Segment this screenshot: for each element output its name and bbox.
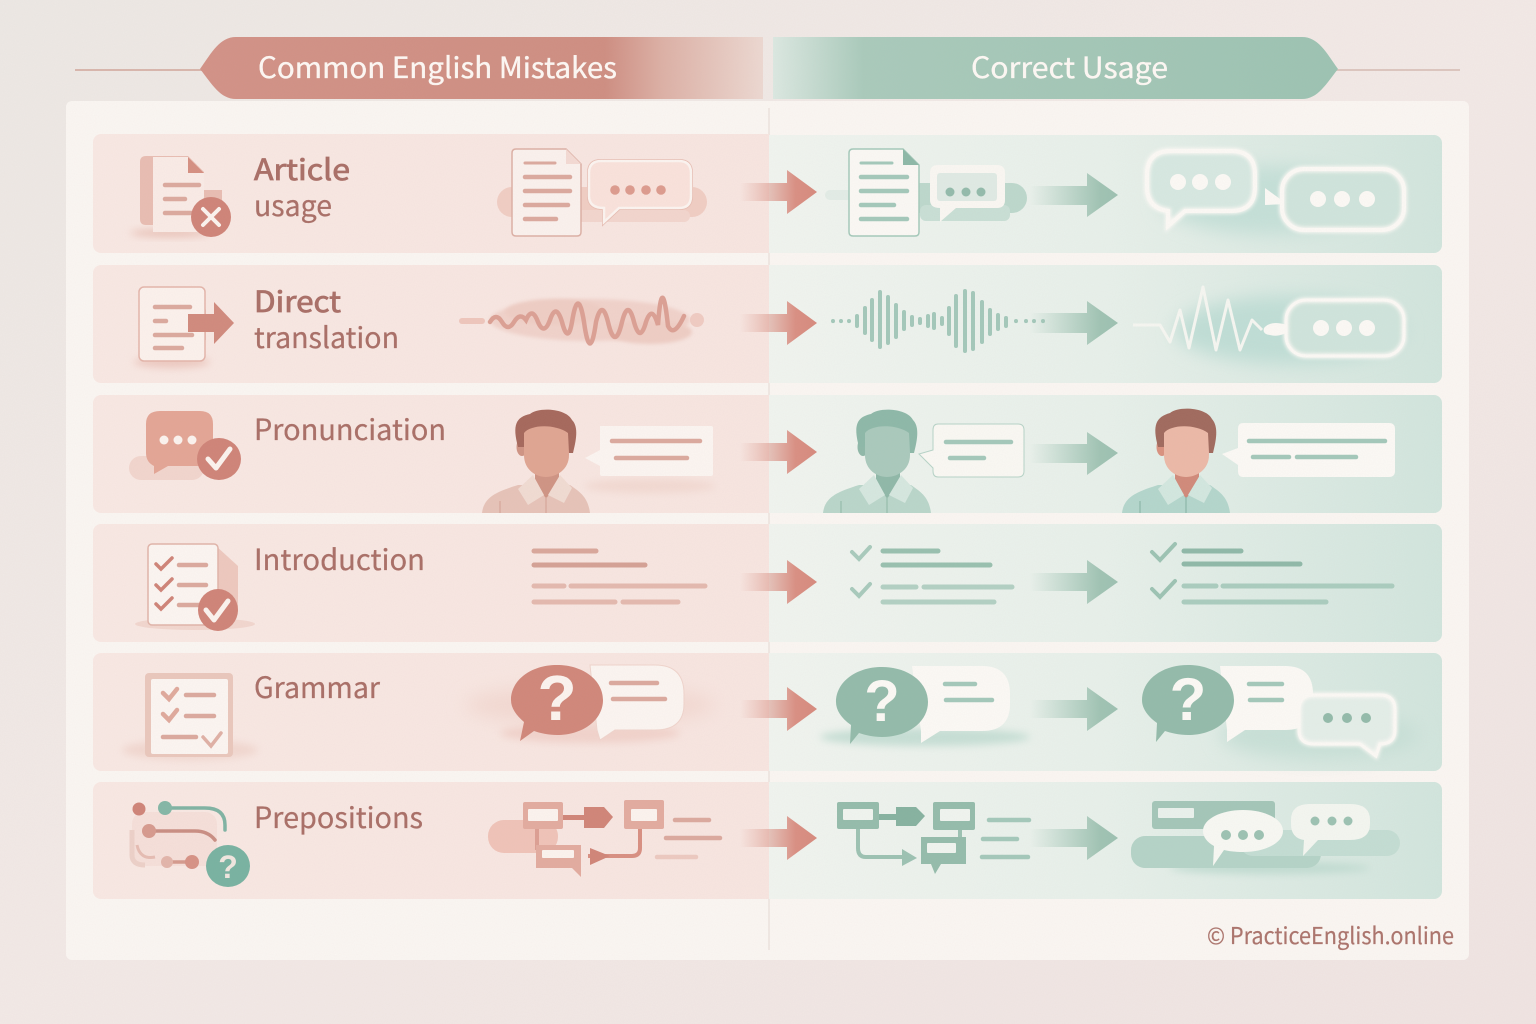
waveform messy	[462, 298, 704, 344]
header: correct usage	[773, 37, 1460, 99]
icon: document with arrow	[134, 281, 234, 368]
flow diagram mistake	[488, 800, 720, 877]
heading: direct translation: Direct	[254, 279, 341, 321]
heading: direct translation: translation	[254, 315, 399, 357]
row 3 backgrounds	[93, 395, 1442, 513]
footer credit: © PracticeEnglish.online	[1207, 917, 1454, 951]
question bubble improved: ?	[864, 669, 900, 734]
row 6: prepositions	[93, 782, 1442, 899]
row 2 backgrounds	[93, 265, 1442, 383]
arrow red	[740, 560, 817, 604]
heading: prepositions: Prepositions	[254, 795, 423, 837]
arrow green	[1030, 687, 1118, 731]
heading: pronunciation: Pronunciation	[254, 407, 446, 449]
icon: document with x	[130, 156, 231, 237]
header: common English mistakes: Common English Mistakes	[258, 45, 617, 87]
question bubble improved	[820, 666, 1030, 746]
question bubble corrected: ?	[1170, 666, 1206, 733]
icon: checklist	[135, 544, 255, 631]
arrow red	[740, 170, 817, 214]
question bubble mistake	[465, 662, 715, 743]
heading: direct translation	[254, 279, 399, 357]
row 4 backgrounds	[93, 524, 1442, 642]
text lines corrected	[1152, 544, 1392, 602]
icon: route with question	[132, 801, 250, 887]
arrow red	[740, 430, 817, 474]
row 1 backgrounds	[93, 134, 1442, 253]
icon: grammar sheet	[122, 673, 258, 760]
row 1: article usage	[93, 134, 1442, 253]
arrow green	[1030, 173, 1118, 217]
header: correct usage: Correct Usage	[971, 45, 1168, 87]
heading: article usage: Article	[254, 147, 350, 189]
heading: grammar: Grammar	[254, 665, 381, 707]
mistake illustration	[497, 149, 707, 236]
row 4: introduction	[93, 524, 1442, 642]
person corrected	[1122, 409, 1395, 513]
heading: article usage: usage	[254, 183, 332, 225]
person speaking with notes	[482, 410, 716, 513]
main white panel	[66, 101, 1469, 960]
arrow green	[1030, 816, 1118, 860]
improved illustration	[825, 149, 1027, 236]
arrow green	[1030, 560, 1118, 604]
pulse line and bubble	[1133, 287, 1405, 364]
flow diagram improved	[837, 802, 1029, 874]
row 6 backgrounds	[93, 782, 1442, 899]
header: common English mistakes	[75, 37, 763, 99]
text lines: mistake	[534, 551, 705, 602]
arrow red	[740, 687, 817, 731]
question bubble corrected	[1142, 665, 1420, 759]
conversation bubbles corrected	[1131, 801, 1400, 874]
row 5: grammar	[93, 653, 1442, 771]
arrow red	[740, 816, 817, 860]
arrow green	[1030, 301, 1118, 345]
row 3: pronunciation	[93, 395, 1442, 513]
text lines with checks	[852, 547, 1012, 602]
icon: speech bubble with check	[129, 411, 241, 480]
icon: route with question: ?	[218, 849, 238, 885]
row 2: direct translation	[93, 265, 1442, 383]
question bubble mistake: ?	[537, 662, 577, 734]
row 5 backgrounds	[93, 653, 1442, 771]
waveform clean	[833, 291, 1043, 351]
heading: introduction: Introduction	[254, 537, 425, 579]
arrow green	[1030, 432, 1118, 475]
heading: article usage	[254, 147, 350, 225]
corrected conversation bubbles	[1147, 151, 1404, 234]
arrow red	[740, 301, 817, 345]
person speaking improved	[823, 410, 1024, 513]
